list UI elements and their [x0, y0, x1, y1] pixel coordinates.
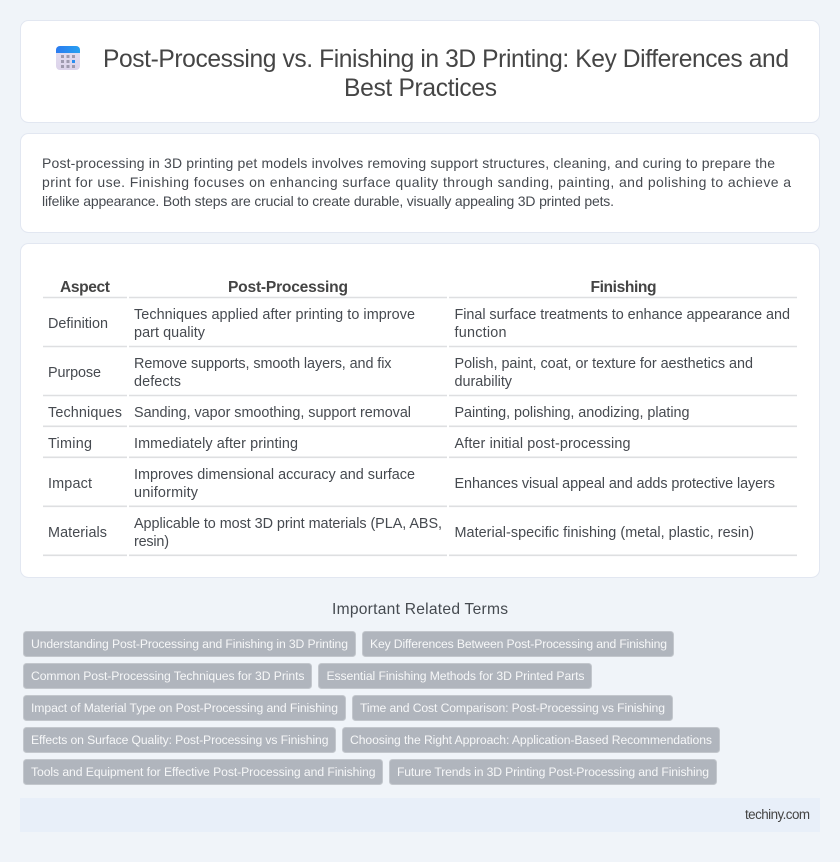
tag row 2: [24, 664, 592, 688]
panel: introduction: [20, 134, 820, 232]
row: materials: Material-specific finishing (metal, plastic, resin): [454, 525, 754, 541]
tag row 3: [24, 696, 672, 720]
row: impact: Enhances visual appeal and adds protective layers: [454, 476, 775, 492]
tag row 1: Key Differences Between Post-Processing and Finishing: [370, 637, 667, 651]
related terms tags: [24, 632, 720, 784]
panel: header: [20, 20, 820, 122]
row: timing: After initial post-processing: [454, 436, 630, 452]
row: techniques: Techniques: [48, 405, 122, 421]
row: timing: Immediately after printing: [134, 436, 298, 452]
table header row: Finishing: [590, 279, 656, 296]
tag row 4: Effects on Surface Quality: Post-Processing vs Finishing: [31, 733, 328, 747]
row: timing: [48, 436, 630, 452]
row: purpose: Remove supports, smooth layers, and fix: [134, 356, 392, 372]
row: impact: [48, 467, 775, 501]
row: purpose: durability: [454, 374, 513, 390]
footer: techiny.com: [745, 807, 810, 822]
tag row 3: Impact of Material Type on Post-Processing and Finishing: [31, 701, 338, 715]
row: definition: Final surface treatments to enhance appearance and: [454, 307, 790, 323]
row: techniques: [48, 405, 690, 421]
row: purpose: Purpose: [48, 365, 101, 381]
row: timing: Timing: [48, 436, 92, 452]
row: techniques: Sanding, vapor smoothing, support removal: [134, 405, 411, 421]
tag row 4: [24, 728, 720, 752]
row: impact: Improves dimensional accuracy and surface: [134, 467, 415, 483]
text block: introduction: [42, 155, 791, 209]
tag row 5: [24, 760, 716, 784]
row: definition: [48, 307, 790, 341]
tag row 4: Choosing the Right Approach: Application-Based Recommendations: [350, 733, 712, 747]
row: materials: resin): [134, 534, 169, 550]
row: purpose: Polish, paint, coat, or texture for aesthetics and: [454, 356, 753, 372]
row: impact: uniformity: [134, 485, 199, 501]
text block: introduction: lifelike appearance. Both steps are crucial to create durable, visually appealing 3D printed pets.: [42, 193, 614, 209]
tag row 1: Understanding Post-Processing and Finishing in 3D Printing: [31, 637, 348, 651]
table header row: Post-Processing: [228, 279, 348, 296]
heading: related terms: Important Related Terms: [332, 601, 508, 618]
row: materials: Applicable to most 3D print materials (PLA, ABS,: [134, 516, 442, 532]
row: definition: Definition: [48, 316, 108, 332]
tag row 1: [24, 632, 674, 656]
icon: calendar: [56, 46, 80, 70]
text block: introduction: Post-processing in 3D printing pet models involves removing support structures, cleaning, and curing to prepare the: [42, 155, 775, 171]
tag row 2: Common Post-Processing Techniques for 3D Prints: [31, 669, 304, 683]
row: definition: Techniques applied after printing to improve: [134, 307, 415, 323]
row: definition: function: [454, 325, 506, 341]
title: Best Practices: [344, 75, 497, 102]
tag row 2: Essential Finishing Methods for 3D Printed Parts: [326, 669, 584, 683]
text block: introduction: print for use. Finishing focuses on enhancing surface quality through sanding, painting, and polishing to achieve a: [42, 174, 791, 190]
table header row: [60, 279, 656, 296]
footer: [20, 798, 820, 832]
tag row 3: Time and Cost Comparison: Post-Processing vs Finishing: [360, 701, 665, 715]
row: impact: Impact: [48, 476, 92, 492]
row: materials: [48, 516, 754, 550]
row: definition: part quality: [134, 325, 206, 341]
row: purpose: defects: [134, 374, 181, 390]
title: [103, 46, 789, 102]
tag row 5: Future Trends in 3D Printing Post-Processing and Finishing: [397, 765, 709, 779]
row: purpose: [48, 356, 753, 390]
tag row 5: Tools and Equipment for Effective Post-Processing and Finishing: [31, 765, 376, 779]
title: Post-Processing vs. Finishing in 3D Printing: Key Differences and: [103, 46, 789, 73]
table header row: Aspect: [60, 279, 110, 296]
row: techniques: Painting, polishing, anodizing, plating: [454, 405, 690, 421]
panel: comparison table: [20, 244, 820, 578]
row: materials: Materials: [48, 525, 107, 541]
